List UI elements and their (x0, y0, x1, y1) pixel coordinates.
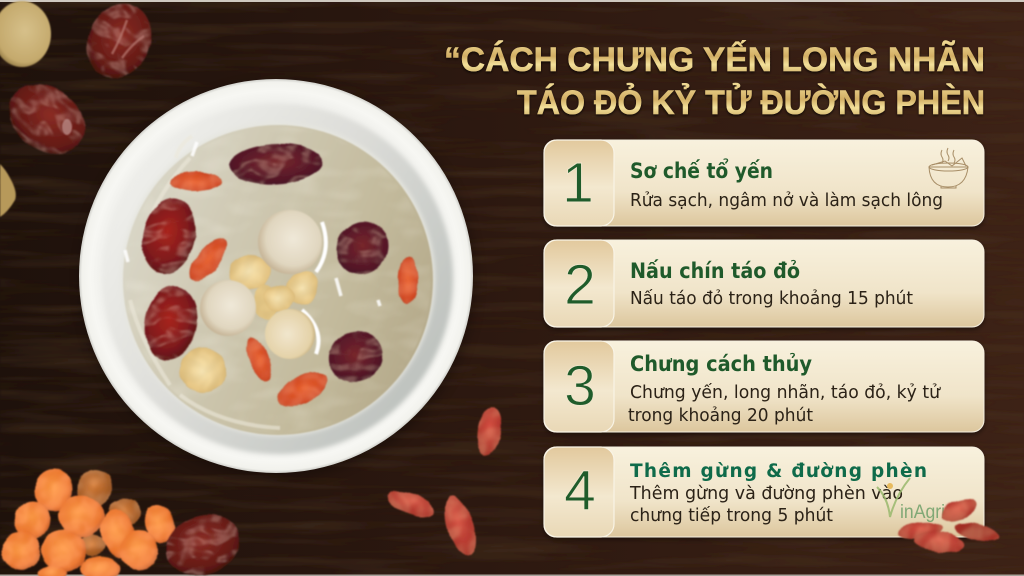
number 2 (544, 240, 614, 327)
soup surface (123, 125, 433, 435)
step 2 text: Nấu táo đỏ trong khoảng 15 phút (630, 288, 913, 309)
step 3 card (544, 341, 984, 432)
title (444, 41, 985, 122)
step 3 heading: Chưng cách thủy (630, 352, 812, 376)
red date, bottom (157, 505, 249, 576)
step 2 card (544, 240, 984, 327)
number 3 (544, 341, 614, 432)
step 4 card (544, 447, 984, 537)
number 4: 4 (564, 459, 596, 523)
logo: VinAgri (877, 478, 945, 523)
number 1: 1 (562, 151, 594, 215)
red dates in soup (136, 142, 397, 391)
step 3 text: trong khoảng 20 phút (628, 406, 813, 426)
dried longan pile, bottom left (1, 469, 181, 576)
step 4 text: Thêm gừng và đường phèn vào (629, 484, 903, 504)
step 3 text: Chưng yến, long nhãn, táo đỏ, kỷ tử (630, 382, 941, 403)
number 3: 3 (564, 354, 596, 418)
step 4 text (629, 484, 903, 526)
bowl of bird's nest soup (79, 79, 475, 477)
number 4 (544, 447, 614, 537)
number 1 (544, 140, 614, 226)
longan and lotus seeds (179, 210, 326, 392)
number 2: 2 (564, 253, 596, 317)
icon: steaming bowl (929, 148, 968, 188)
goji berries on table (385, 404, 504, 558)
goji berries over card corner (898, 495, 1001, 555)
step 2 heading: Nấu chín táo đỏ (630, 259, 800, 283)
goji berries in soup (170, 172, 418, 414)
step 1 heading: Sơ chế tổ yến (630, 158, 773, 183)
logo: VinAgri: inAgri (900, 502, 945, 523)
step 4 heading: Thêm gừng & đường phèn (630, 461, 927, 482)
step 4 text: chưng tiếp trong 5 phút (630, 505, 833, 526)
step 3 text (628, 382, 941, 426)
title: TÁO ĐỎ KỶ TỬ ĐƯỜNG PHÈN (517, 84, 985, 122)
scattered longan and dates, top left (0, 0, 163, 217)
step 1 text: Rửa sạch, ngâm nở và làm sạch lông (630, 191, 943, 211)
title: “CÁCH CHƯNG YẾN LONG NHÃN (444, 41, 985, 79)
step 1 card (544, 140, 984, 226)
